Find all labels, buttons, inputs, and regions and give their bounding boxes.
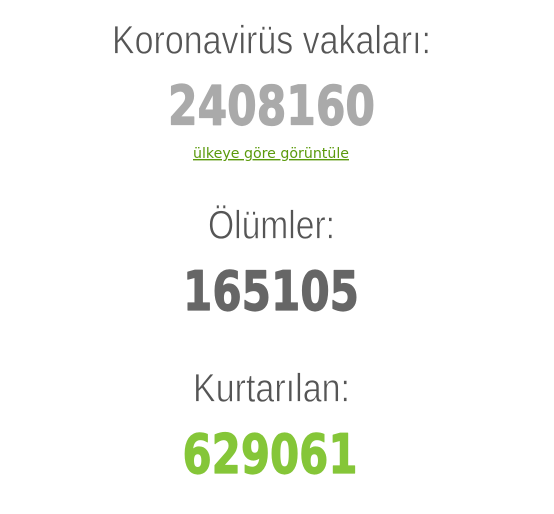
number: total cases: 2408160 [168, 74, 375, 138]
heading: deaths: Ölümler: [208, 204, 335, 248]
link: view by country: ülkeye göre görüntüle [193, 146, 349, 162]
heading: cases: Koronavirüs vakaları: [112, 18, 431, 62]
heading: recovered: Kurtarılan: [193, 366, 350, 410]
number: deaths: 165105 [183, 260, 359, 323]
number: recovered: 629061 [182, 423, 358, 486]
